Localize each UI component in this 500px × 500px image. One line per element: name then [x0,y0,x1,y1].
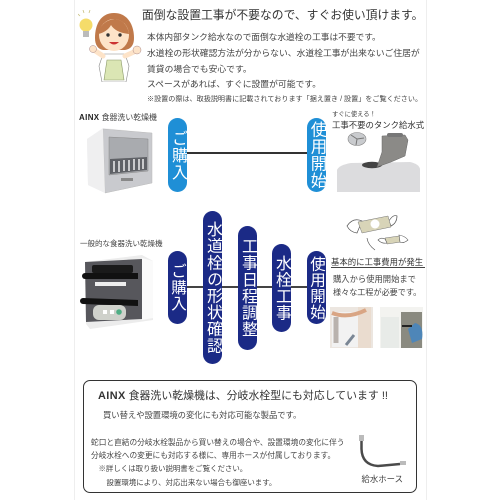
intro text block: ※設置の際は、取扱説明書に記載されております「据え置き / 設置」をご覧ください。 [147,94,422,102]
panel: AINX branch faucet support [83,380,417,493]
step: purchase: ご購入 [169,263,186,312]
icon: flying money [346,215,408,250]
icon: water hose [359,435,406,468]
panel body text: 分岐水栓への変更にも対応する様に、専用ホースが付属しております。 [91,451,335,460]
hose caption: 給水ホース [362,474,403,484]
panel heading: AINX 食器洗い乾燥機は、分岐水栓型にも対応しています !! [98,390,388,402]
panel body text: 設置環境により、対応出来ない場合も御座います。 [106,478,276,487]
intro text block [147,32,422,102]
step: faucet work [272,244,291,332]
note: many steps needed [333,274,421,297]
caption: tank water supply: すぐに使える！ [332,111,376,118]
intro text block: 水道栓の形状確認方法が分からない、水道栓工事が出来ないご住居が [147,48,420,58]
note: many steps needed: 様々な工程が必要です。 [333,288,421,297]
label: generic dishwasher: 一般的な食器洗い乾燥機 [80,239,162,248]
panel body text: 蛇口と直結の分岐水栓製品から買い替えの場合や、設置環境の変化に伴う [91,438,344,446]
icon: woman with light bulb [78,10,142,82]
icon: tank water supply [337,132,420,192]
step: schedule adjustment: 工事日程調整 [239,238,256,338]
icon: AINX dishwasher [87,128,152,194]
photo: drilling work [380,307,423,348]
caption: tank water supply: 工事不要のタンク給水式 [332,120,424,130]
step: start of use: 使用開始 [308,256,325,320]
step: purchase: ご購入 [169,130,186,180]
photo: installation work [330,307,373,348]
step: purchase [168,118,187,192]
icon: generic dishwasher [80,255,153,329]
step: purchase [168,251,187,324]
intro text block: 賃貸の場合でも安心です。 [147,64,252,74]
intro text block: スペースがあれば、すぐに設置が可能です。 [147,79,321,89]
note: many steps needed: 購入から使用開始まで [333,274,416,284]
intro text block: 本体内部タンク給水なので面倒な水道栓の工事は不要です。 [147,32,381,42]
connector line: lower flow [187,286,307,288]
panel subheading: 買い替えや設置環境の変化にも対応可能な製品です。 [103,410,301,420]
subheading: construction cost: 基本的に工事費用が発生 [331,257,423,267]
step: faucet work: 水栓工事 [273,255,290,321]
label: AINX dishwasher: AINX 食器洗い乾燥機 [79,113,157,122]
panel body text [91,438,344,487]
panel body text: ※詳しくは取り扱い説明書をご覧ください。 [98,464,247,473]
heading: 面倒な設置工事が不要なので、すぐお使い頂けます。 [142,8,423,22]
caption: tank water supply [332,110,424,130]
step: faucet shape check: 水道栓の形状確認 [204,221,221,354]
step: start of use: 使用開始 [308,121,326,189]
connector line: top flow [187,152,307,154]
